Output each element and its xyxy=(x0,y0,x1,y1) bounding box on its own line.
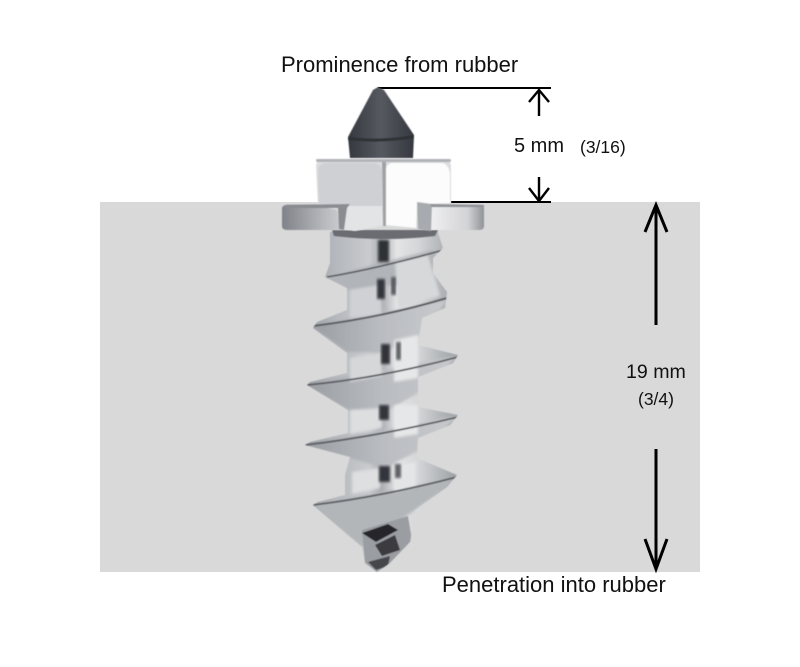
arrow: 19 mm down xyxy=(645,449,667,569)
infographic: screw stud dimensions xyxy=(100,56,700,592)
broken tip xyxy=(362,516,412,572)
bright shaft highlights xyxy=(395,255,440,308)
thread edges xyxy=(327,250,443,277)
hex nut xyxy=(286,159,484,231)
carbide tip xyxy=(348,87,414,158)
label: 3/16: (3/16) xyxy=(580,137,626,157)
label: 3/4: (3/4) xyxy=(638,389,674,409)
flange washer xyxy=(282,205,484,230)
title: prominence from rubber: Prominence from rubber xyxy=(281,52,518,77)
icon: screw stud xyxy=(282,87,484,572)
arrow: 5 mm up xyxy=(529,90,549,116)
dark specks on shaft xyxy=(378,240,389,262)
panel: rubber block xyxy=(100,202,700,572)
arrow: 5 mm down xyxy=(529,177,549,201)
dark neck under flange xyxy=(332,230,438,239)
arrow: 19 mm up xyxy=(645,205,667,325)
screw body xyxy=(305,230,458,572)
label: 19 mm: 19 mm xyxy=(626,361,686,383)
label: 5 mm: 5 mm xyxy=(514,135,564,157)
thread faces xyxy=(342,250,435,289)
dimension lines: top of stud xyxy=(378,87,551,89)
dimension lines: rubber surface xyxy=(451,201,551,203)
label: penetration into rubber: Penetration into rubber xyxy=(442,572,666,597)
